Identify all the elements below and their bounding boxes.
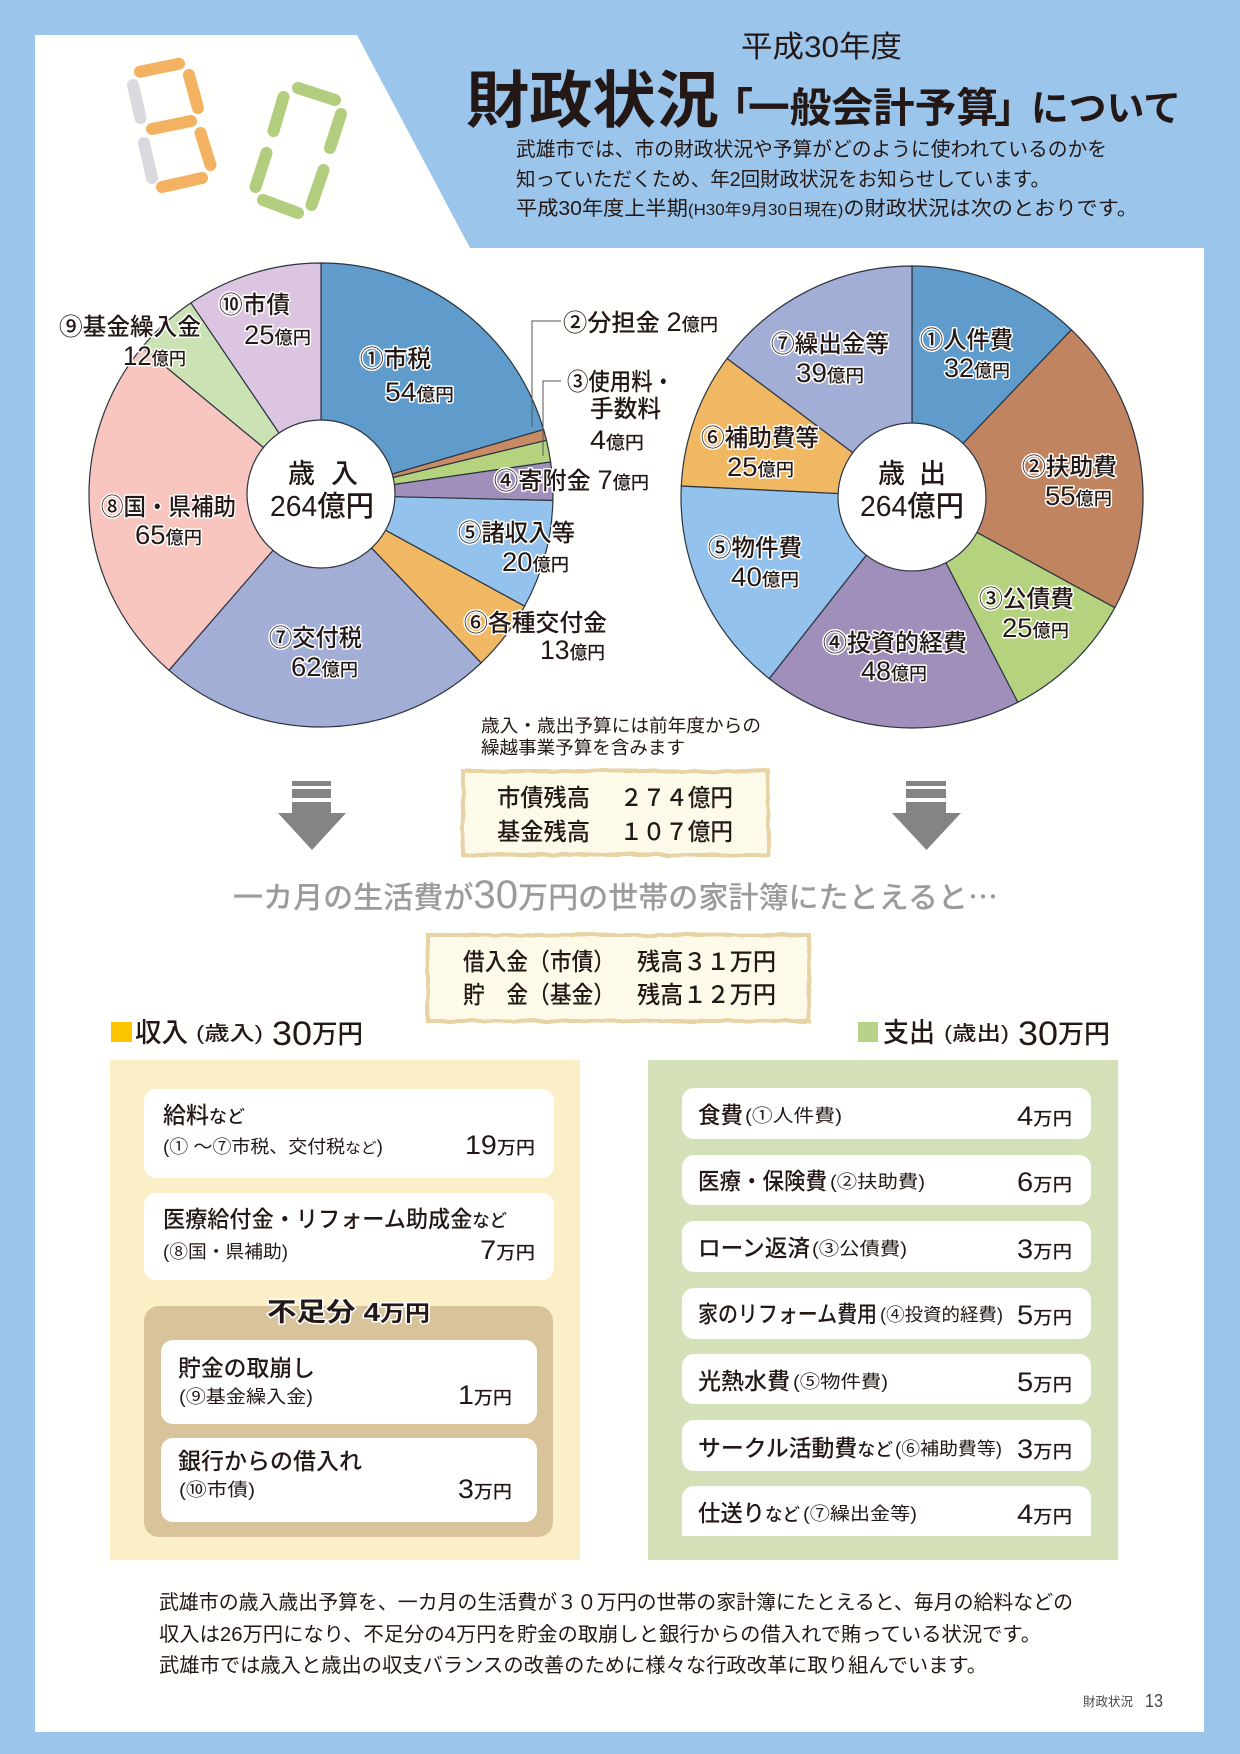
heading: expenditure 30万円 <box>858 1015 1110 1053</box>
label: 市債 <box>219 292 311 350</box>
arrow: left down arrow <box>278 781 346 850</box>
label: 人件費: 32億円 <box>944 353 1010 383</box>
label: 公債費 <box>979 586 1074 643</box>
heading: expenditure 30万円: 30 <box>1018 1015 1058 1053</box>
label: 繰出金等 <box>771 331 889 388</box>
row: allowance: (⑦繰出金等) <box>803 1504 917 1524</box>
row: club activities <box>682 1420 1091 1471</box>
row: house reform: (④投資的経費) <box>880 1305 1003 1325</box>
page footer <box>1083 1691 1163 1711</box>
row: house reform <box>682 1288 1091 1339</box>
title: main heading: 「 <box>712 85 753 131</box>
row: loan repayment <box>682 1221 1091 1272</box>
title: main heading <box>466 67 1181 136</box>
label: 交付税: ⑦交付税 <box>269 625 362 652</box>
summary text: 武雄市では歳入と歳出の収支バランスの改善のために様々な行政改革に取り組んでいます。 <box>159 1654 987 1677</box>
arrow: right down arrow <box>892 781 961 850</box>
pie chart: revenue 歳入 <box>59 263 718 727</box>
callout: city debt and fund balance: 基金残高 <box>497 819 590 846</box>
note: budget includes carryover: 歳入・歳出予算には前年度からの <box>481 716 761 736</box>
card: bank loan: 銀行からの借入れ <box>178 1448 362 1474</box>
row: allowance: 4万円 <box>1017 1499 1072 1529</box>
callout: city debt and fund balance: 市債残高 <box>497 785 590 812</box>
intro text: 知っていただくため、年2回財政状況をお知らせしています。 <box>516 168 1050 191</box>
row: food: 食費 <box>698 1102 743 1128</box>
label: 各種交付金 <box>464 610 607 665</box>
label: 補助費等 <box>701 425 819 482</box>
panel: income breakdown <box>110 1060 580 1560</box>
row: allowance <box>682 1486 1091 1536</box>
row: medical and insurance: 医療・保険費 <box>698 1168 827 1194</box>
label: 基金繰入金: ⑨基金繰入金 <box>59 314 201 341</box>
panel: shortfall <box>144 1297 553 1537</box>
label: 扶助費: ②扶助費 <box>1022 454 1117 481</box>
card: salary: 19万円 <box>465 1130 535 1160</box>
label: 公債費: ③公債費 <box>979 586 1074 613</box>
label: 扶助費: 55億円 <box>1045 481 1112 511</box>
row: food: 4万円 <box>1017 1101 1072 1131</box>
label: 諸収入等: ⑤諸収入等 <box>458 520 575 547</box>
card: bank loan <box>161 1438 537 1522</box>
title: main heading: について <box>1031 88 1181 129</box>
center label: 歳出: 出 <box>919 459 946 489</box>
label: 寄附金: ④寄附金 7億円 <box>494 465 649 495</box>
heading: income 30万円: 万円 <box>312 1019 363 1049</box>
summary text: 武雄市の歳入歳出予算を、一カ月の生活費が３０万円の世帯の家計簿にたとえると、毎月の給料などの <box>159 1591 1073 1614</box>
callout: loan and savings balance: 借入金（市債） <box>463 949 615 976</box>
title: main heading: 一般会計予算 <box>748 85 998 131</box>
page footer: 財政状況 <box>1083 1694 1133 1709</box>
row: utilities <box>682 1354 1091 1404</box>
panel: expenditure breakdown <box>648 1060 1118 1560</box>
label: 諸収入等: 20億円 <box>502 547 569 577</box>
row: allowance: 仕送りなど <box>698 1500 800 1526</box>
row: loan repayment: (③公債費) <box>812 1239 907 1259</box>
card: bank loan: 3万円 <box>458 1474 512 1504</box>
icon: seven-segment number 0 <box>256 88 341 213</box>
center label: 歳出 <box>860 459 964 523</box>
heading: household analogy: 一カ月の生活費が30万円の世帯の家計簿にたとえると… <box>233 873 998 917</box>
label: 市税: ①市税 <box>360 346 431 373</box>
callout: city debt and fund balance: ２７４億円 <box>620 785 733 812</box>
row: utilities: 5万円 <box>1017 1367 1072 1397</box>
row: utilities: 光熱水費 <box>698 1368 790 1394</box>
heading: expenditure 30万円: 支出 <box>883 1018 935 1048</box>
label: 国・県補助 <box>101 494 236 550</box>
card: salary: (① ～⑦市税、交付税 など) <box>163 1137 383 1157</box>
label: 分担金: ②分担金 2億円 <box>563 307 718 337</box>
intro text: 武雄市では、市の財政状況や予算がどのように使われているのかを <box>516 138 1107 161</box>
row: medical and insurance <box>682 1155 1091 1205</box>
center label: 歳出: 歳 <box>878 459 905 489</box>
card: salary: 給料など <box>163 1102 245 1128</box>
label: 基金繰入金: 12億円 <box>123 341 186 371</box>
row: food: (①人件費) <box>745 1106 842 1126</box>
row: utilities: (⑤物件費) <box>793 1372 888 1392</box>
label: 交付税 <box>269 625 362 682</box>
callout: loan and savings balance: 貯 金（基金） <box>463 982 615 1009</box>
callout: city debt and fund balance <box>463 771 768 855</box>
card: savings withdrawal <box>161 1340 537 1424</box>
callout: city debt and fund balance: １０７億円 <box>620 819 733 846</box>
label: 投資的経費: 48億円 <box>861 656 927 686</box>
label: 投資的経費: ④投資的経費 <box>823 630 967 657</box>
label: 繰出金等: 39億円 <box>796 358 864 388</box>
label: 使用料・手数料 <box>567 369 674 455</box>
label: 扶助費 <box>1022 454 1117 511</box>
title: main heading: 財政状況 <box>466 67 719 136</box>
icon: seven-segment number 3 <box>133 64 210 187</box>
row: loan repayment: ローン返済 <box>698 1235 810 1261</box>
pie chart: expenditure 歳出 <box>681 266 1143 728</box>
center label: 歳入: 歳 <box>288 459 315 489</box>
row: club activities: 3万円 <box>1017 1434 1072 1464</box>
card: salary <box>144 1089 554 1178</box>
card: medical and reform grants: (⑧国・県補助) <box>163 1242 288 1262</box>
label: 国・県補助: 65億円 <box>135 520 202 550</box>
heading: expenditure 30万円: 万円 <box>1058 1019 1110 1049</box>
label: 人件費 <box>920 327 1013 383</box>
label: 各種交付金: 13億円 <box>540 635 605 665</box>
label: 市税 <box>360 346 454 407</box>
shortfall heading: 不足分 4 万円 <box>267 1297 430 1327</box>
summary text: 収入は26万円になり、不足分の4万円を貯金の取崩しと銀行からの借入れで賄っている状況です。 <box>159 1623 1041 1646</box>
label: 補助費等: ⑥補助費等 <box>701 425 819 452</box>
center label: 歳出: 264億円 <box>860 490 964 523</box>
callout: loan and savings balance: 残高３１万円 <box>637 949 776 976</box>
leader line: 分担金 <box>532 321 561 427</box>
heading: income 30万円: 収入 <box>135 1018 188 1048</box>
row: food <box>682 1088 1091 1139</box>
label: 交付税: 62億円 <box>291 652 358 682</box>
label: 物件費: 40億円 <box>731 562 799 592</box>
label: 国・県補助: ⑧国・県補助 <box>101 494 236 521</box>
heading: income 30万円 <box>111 1015 363 1053</box>
row: medical and insurance: (②扶助費) <box>830 1172 925 1192</box>
label: 市債: 25億円 <box>244 320 311 350</box>
note: budget includes carryover <box>481 716 761 758</box>
summary text <box>159 1591 1073 1677</box>
label: 物件費: ⑤物件費 <box>708 535 802 562</box>
row: club activities: (⑥補助費等) <box>895 1439 1002 1459</box>
center label: 歳入 <box>270 459 374 523</box>
row: loan repayment: 3万円 <box>1017 1234 1072 1264</box>
card: savings withdrawal: (⑨基金繰入金) <box>179 1387 313 1407</box>
label: 各種交付金: ⑥各種交付金 <box>464 610 607 637</box>
label: 物件費 <box>708 535 802 592</box>
card: medical and reform grants: 医療給付金・リフォーム助成金など <box>163 1206 507 1232</box>
row: medical and insurance: 6万円 <box>1017 1167 1072 1197</box>
label: 投資的経費 <box>823 630 967 686</box>
label: 市税: 54億円 <box>385 377 454 407</box>
label: 市債: ⑩市債 <box>219 292 290 319</box>
row: house reform: 家のリフォーム費用 <box>698 1301 877 1327</box>
card: medical and reform grants: 7万円 <box>480 1235 535 1265</box>
title: fiscal year: 平成30年度 <box>741 31 902 64</box>
leader line: 使用料・手数料 <box>543 381 561 456</box>
intro text <box>516 138 1138 220</box>
label: 公債費: 25億円 <box>1002 613 1069 643</box>
note: budget includes carryover: 繰越事業予算を含みます <box>481 738 685 758</box>
card: savings withdrawal: 1万円 <box>458 1380 512 1410</box>
row: club activities: サークル活動費など <box>698 1435 893 1461</box>
card: savings withdrawal: 貯金の取崩し <box>178 1355 315 1381</box>
label: 繰出金等: ⑦繰出金等 <box>771 331 889 358</box>
title: main heading: 」 <box>994 85 1035 131</box>
heading: income 30万円: 30 <box>272 1015 312 1053</box>
intro text: 平成30年度上半期 (H30年9月30日現在) の財政状況は次のとおりです。 <box>516 197 1138 220</box>
label: 基金繰入金 <box>59 314 201 371</box>
heading: expenditure 30万円: (歳出) <box>944 1022 1009 1045</box>
card: medical and reform grants <box>144 1193 554 1280</box>
callout: loan and savings balance: 残高１２万円 <box>637 982 776 1009</box>
label: 諸収入等 <box>458 520 575 577</box>
center label: 歳入: 入 <box>331 459 358 489</box>
page footer: 13 <box>1145 1691 1163 1711</box>
label: 使用料・手数料: ③使用料・ <box>567 369 674 396</box>
heading: income 30万円: (歳入) <box>196 1022 263 1045</box>
card: bank loan: (⑩市債) <box>179 1480 255 1500</box>
label: 人件費: ①人件費 <box>920 327 1013 354</box>
row: house reform: 5万円 <box>1017 1300 1072 1330</box>
label: 補助費等: 25億円 <box>727 452 794 482</box>
center label: 歳入: 264億円 <box>270 490 374 523</box>
callout: loan and savings balance <box>428 935 809 1021</box>
label: 使用料・手数料: 4億円 <box>590 425 644 455</box>
label: 使用料・手数料: 手数料 <box>590 396 661 423</box>
